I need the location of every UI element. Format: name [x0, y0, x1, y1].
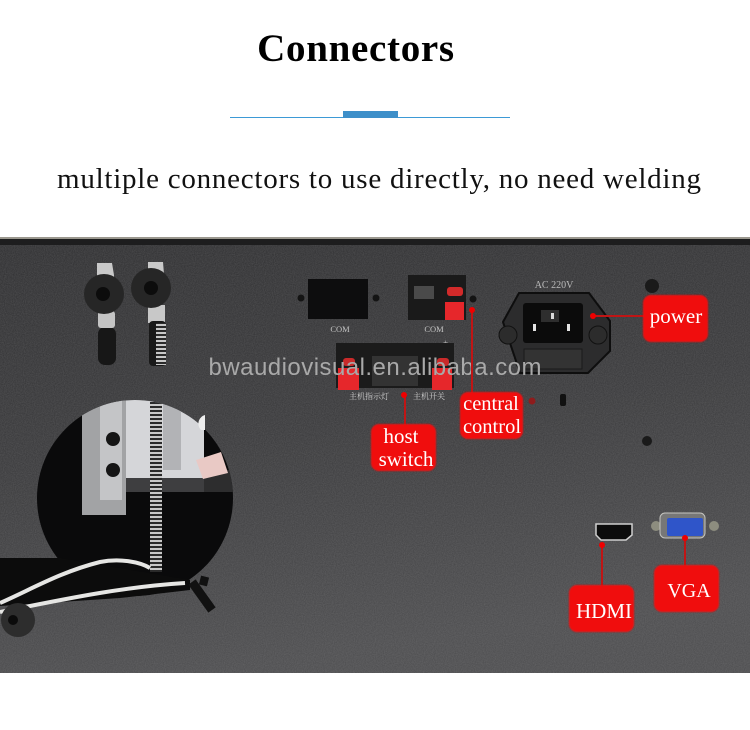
VGA port [651, 513, 719, 538]
power inlet socket: AC 220V [535, 280, 574, 291]
callout: host switch [371, 392, 436, 471]
red terminal block, COM: COM [424, 324, 444, 334]
callout: host switch: switch [379, 447, 434, 471]
callout: central control: central [463, 393, 519, 415]
panel: connector photo [0, 237, 750, 673]
watermark: bwaudiovisual.en.alibaba.com [208, 354, 542, 381]
indicator light and small switches [528, 279, 659, 446]
red terminal block, COM: + [443, 338, 448, 348]
red terminal block, host [336, 343, 454, 401]
photo background [0, 237, 750, 673]
HDMI port [596, 524, 632, 540]
red terminal block, host: 主机开关 [413, 391, 445, 401]
red terminal block, host: 主机指示灯 [349, 391, 389, 401]
callout: host switch: host [383, 424, 419, 448]
speaker terminal cutout, COM: COM [330, 324, 350, 334]
title: Connectors [257, 27, 455, 70]
mounting disc with spring [37, 400, 234, 596]
callout: central control [460, 307, 523, 439]
subtitle: multiple connectors to use directly, no need welding [57, 163, 701, 195]
callout: power [590, 295, 708, 342]
callout: HDMI: HDMI [576, 599, 632, 623]
callout: HDMI [569, 542, 634, 632]
red terminal block, COM [408, 275, 476, 348]
power inlet socket [499, 280, 610, 373]
white and black cables [0, 558, 212, 637]
speaker terminal cutout, COM [298, 279, 380, 334]
title divider [230, 111, 510, 118]
callout: central control: control [463, 416, 521, 438]
clips and spring, upper left [84, 262, 171, 366]
callout: VGA: VGA [667, 580, 711, 602]
callout: power: power [650, 304, 702, 328]
callout: VGA [654, 535, 719, 612]
